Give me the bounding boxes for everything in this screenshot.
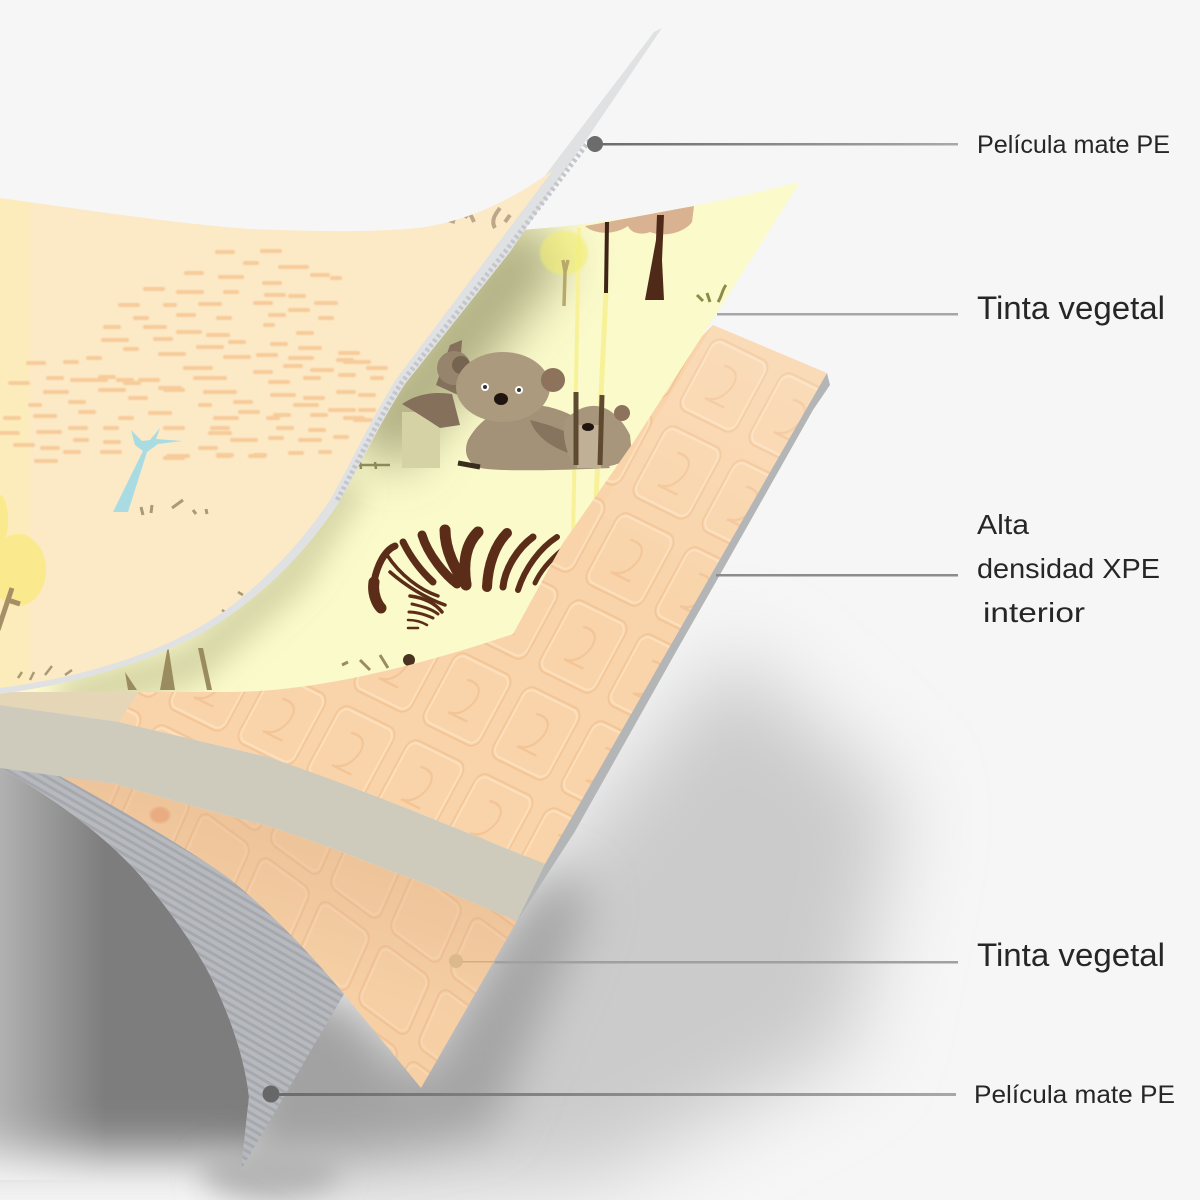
wide faint cast shadow <box>250 650 900 1200</box>
koala big <box>358 340 610 470</box>
lower embossed orange layer <box>60 776 517 1088</box>
connector 2 <box>717 313 958 316</box>
shading near the film <box>370 235 540 450</box>
connector 5 with dot <box>262 1086 956 1102</box>
label: Alta densidad XPE interior: densidad XPE <box>977 553 1160 584</box>
upper embossed orange layer <box>0 325 827 864</box>
label: Película mate PE bottom: Película mate PE <box>974 1081 1175 1109</box>
blue tree <box>113 428 182 512</box>
label: Alta densidad XPE interior <box>977 509 1160 628</box>
label: Alta densidad XPE interior: interior <box>983 597 1085 628</box>
soft shadow below the film tip <box>200 1146 340 1198</box>
grass at top of mat <box>448 208 510 228</box>
connector 4 with faint dot <box>449 954 958 968</box>
top PE matte film edge <box>0 28 662 694</box>
shading along the lower curve <box>60 480 350 700</box>
zebra <box>374 530 562 628</box>
peach printed mat layer <box>0 160 560 700</box>
label: Alta densidad XPE interior: Alta <box>977 509 1029 540</box>
bottom PE matte film layer <box>0 768 360 1170</box>
label: Película mate PE top: Película mate PE <box>977 131 1170 159</box>
trees at top <box>540 206 726 306</box>
small marks <box>18 592 243 680</box>
label: Tinta vegetal top: Tinta vegetal <box>977 290 1165 326</box>
second fold line <box>596 292 606 500</box>
cream foam band XPE <box>0 705 545 921</box>
grey side edge of the foam <box>500 373 830 921</box>
orange foliage dashes <box>0 251 386 461</box>
yellow tree <box>0 495 46 630</box>
yellow printed layer <box>0 170 810 700</box>
tight cast shadow next to the mat <box>240 870 590 1175</box>
grass <box>141 500 207 515</box>
connector 3 <box>716 574 958 576</box>
label: Tinta vegetal bottom: Tinta vegetal <box>977 937 1165 973</box>
fold lines <box>573 228 579 540</box>
bottom trees and grass <box>125 645 415 690</box>
dark curved shadow beneath the mat <box>0 768 249 1190</box>
connector 1 with dot <box>587 136 958 152</box>
koala small <box>564 392 632 469</box>
